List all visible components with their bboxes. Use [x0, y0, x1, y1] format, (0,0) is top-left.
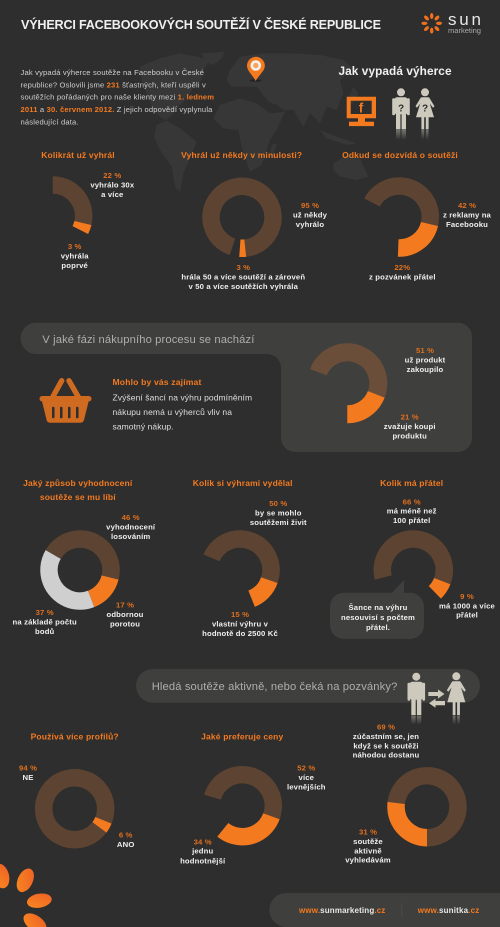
- chart: způsob vyhodnocení: 37 %: [36, 608, 54, 617]
- chart: Kolik má přátel: 9 %: [460, 592, 474, 601]
- donut chart: [307, 343, 387, 423]
- text block: Mohlo by vás zajímat: Mohlo by vás zajímat: [112, 377, 201, 387]
- logo: sun marketing: sun: [448, 10, 481, 29]
- text block: Mohlo by vás zajímat: samotný nákup.: [112, 422, 174, 432]
- chart: Kolikrát už vyhrál: poprvé: [61, 261, 89, 270]
- chart: Kolik si výhrami vydělal: hodnotě do 2500 Kč: [202, 629, 278, 638]
- intro text: následující data.: [20, 117, 79, 126]
- panel: nákupní proces: [21, 323, 472, 452]
- icon: man with question mark: ?: [398, 103, 404, 114]
- chart: způsob vyhodnocení: porotou: [110, 620, 140, 628]
- banner: Hledá soutěže aktivně: Hledá soutěže aktivně, nebo čeká na pozvánky?: [152, 681, 397, 693]
- chart: Jaké preferuje ceny: [180, 732, 326, 865]
- chart: Kolik si výhrami vydělal: by se mohlo: [255, 509, 302, 518]
- chart: Vyhrál už někdy v minulosti: vyhrálo: [296, 220, 324, 229]
- icon: man: [408, 673, 425, 724]
- heading: V jaké fázi nákupního procesu se nachází: [42, 334, 255, 346]
- chart: způsob vyhodnocení: [13, 478, 156, 636]
- chart: Používá více profilů: [19, 732, 134, 849]
- chart: Kolik má přátel: 100 přátel: [393, 516, 430, 525]
- chart: Vyhrál už někdy v minulosti: hrála 50 a více soutěží a zároveň: [181, 272, 305, 282]
- chart: způsob vyhodnocení: 17 %: [116, 601, 134, 610]
- panel: nákupní proces: 21 %: [401, 412, 419, 422]
- heading: Vyhrál už někdy v minulosti?: [181, 150, 302, 160]
- text block: Mohlo by vás zajímat: Zvýšení šancí na výhru podmíněním: [112, 392, 252, 402]
- chart: aktivní hledání soutěží: vyhledávám: [345, 856, 391, 864]
- chart: aktivní hledání soutěží: 69 %: [377, 723, 395, 732]
- callout: šance na výhru: [330, 580, 424, 639]
- heading: Odkud se dozvídá o soutěži: [342, 150, 458, 160]
- title: VÝHERCI FACEBOOKOVÝCH SOUTĚŽÍ V ČESKÉ REPUBLICE: [21, 17, 381, 32]
- chart: Kolik má přátel: má méně než: [387, 507, 437, 516]
- chart: aktivní hledání soutěží: náhodou dostanu: [353, 750, 420, 760]
- chart: aktivní hledání soutěží: 31 %: [359, 828, 377, 837]
- panel: nákupní proces: zakoupilo: [407, 365, 444, 374]
- chart: Odkud se dozvídá o soutěži: 22%: [394, 263, 410, 272]
- panel: nákupní proces: 51 %: [416, 346, 434, 355]
- callout: šance na výhru: Šance na výhru: [349, 603, 408, 612]
- chart: způsob vyhodnocení: losováním: [111, 532, 150, 541]
- chart: Kolikrát už vyhrál: vyhrálo 30x: [90, 180, 135, 190]
- icon: Facebook monitor: [347, 97, 376, 126]
- icon: shopping basket: [40, 381, 92, 423]
- chart: Používá více profilů: 94 %: [19, 764, 37, 773]
- text block: Mohlo by vás zajímat: [112, 377, 252, 432]
- heading: Jaké preferuje ceny: [201, 732, 284, 742]
- logo: sun marketing: [421, 10, 481, 35]
- intro text: Jak vypadá výherce soutěže na Facebooku v České: [20, 68, 204, 77]
- heading: Používá více profilů?: [31, 732, 119, 742]
- chart: Jaké preferuje ceny: jednu: [191, 847, 213, 856]
- chart: Kolik si výhrami vydělal: soutěžemi živit: [250, 518, 307, 527]
- chart: Kolik má přátel: přátel: [456, 611, 478, 620]
- icon: woman with question mark: [416, 88, 434, 140]
- link: sunitka: www.sunitka.cz: [417, 906, 479, 915]
- logo: sun marketing: marketing: [448, 26, 481, 35]
- chart: Odkud se dozvídá o soutěži: [342, 150, 492, 282]
- chart: způsob vyhodnocení: vyhodnocení: [106, 523, 156, 532]
- panel: nákupní proces: už produkt: [405, 356, 446, 364]
- chart: Kolik si výhrami vydělal: 15 %: [231, 610, 249, 619]
- chart: způsob vyhodnocení: na základě počtu: [13, 618, 77, 627]
- icon: woman with question mark: ?: [422, 103, 428, 114]
- heading: Jaký způsob vyhodnocení: [23, 478, 133, 488]
- chart: Kolikrát už vyhrál: 3 %: [68, 242, 82, 251]
- footer bar: [269, 893, 500, 927]
- decorative sun petals: [0, 862, 53, 927]
- intro text: 2011 a 30. červnem 2012. Z jejich odpovědí vyplynula: [20, 105, 213, 114]
- chart: Kolikrát už vyhrál: [16, 150, 135, 270]
- chart: Jaké preferuje ceny: 34 %: [194, 837, 212, 846]
- chart: Vyhrál už někdy v minulosti: už někdy: [293, 211, 328, 220]
- chart: Odkud se dozvídá o soutěži: z reklamy na: [443, 211, 492, 220]
- chart: aktivní hledání soutěží: aktivně: [354, 846, 382, 855]
- banner: Hledá soutěže aktivně: [136, 669, 480, 703]
- chart: Kolik si výhrami vydělal: 50 %: [269, 499, 287, 508]
- chart: způsob vyhodnocení: bodů: [35, 627, 55, 636]
- icon: arrows: [428, 690, 445, 708]
- panel: nákupní proces: produktu: [392, 432, 427, 440]
- chart: Jaké preferuje ceny: 52 %: [297, 764, 315, 773]
- chart: Kolikrát už vyhrál: vyhrála: [61, 252, 89, 260]
- panel: nákupní proces: zvažuje koupi: [384, 422, 436, 431]
- chart: způsob vyhodnocení: 46 %: [122, 513, 140, 522]
- chart: Kolik si výhrami vydělal: vlastní výhru v: [212, 620, 269, 629]
- intro text: republice? Oslovili jsme 231 šťastných, kteří uspěli v: [20, 80, 206, 89]
- intro text: soutěžích pořádaných pro naše klienty mezi 1. lednem: [20, 93, 214, 102]
- chart: Odkud se dozvídá o soutěži: z pozvánek přátel: [369, 272, 436, 282]
- icon: woman: [447, 672, 466, 724]
- chart: Kolik má přátel: má 1000 a více: [439, 601, 496, 610]
- chart: aktivní hledání soutěží: [345, 723, 462, 864]
- chart: způsob vyhodnocení: odbornou: [106, 610, 144, 619]
- heading: Kolik si výhrami vydělal: [193, 478, 293, 488]
- icon: map pin: [247, 57, 265, 82]
- chart: Odkud se dozvídá o soutěži: Facebooku: [446, 220, 488, 229]
- chart: Kolik si výhrami vydělal: [193, 478, 307, 638]
- text block: Mohlo by vás zajímat: nákupu nemá u výherců vliv na: [112, 407, 232, 417]
- chart: Vyhrál už někdy v minulosti: 95 %: [301, 201, 319, 210]
- chart: Odkud se dozvídá o soutěži: 42 %: [458, 201, 476, 210]
- heading: Jak vypadá výherce: Jak vypadá výherce: [338, 64, 452, 78]
- chart: Jaké preferuje ceny: levnějších: [287, 783, 326, 792]
- chart: Používá více profilů: ANO: [117, 840, 134, 849]
- chart: Jaké preferuje ceny: více: [299, 773, 315, 782]
- chart: aktivní hledání soutěží: soutěže: [353, 837, 383, 846]
- heading: Kolik má přátel: [380, 478, 443, 488]
- chart: Vyhrál už někdy v minulosti: v 50 a více soutěžích vyhrála: [189, 282, 299, 291]
- chart: Kolikrát už vyhrál: a více: [101, 190, 124, 199]
- icon: Facebook monitor: f: [359, 100, 364, 116]
- chart: Kolik má přátel: 66 %: [403, 497, 421, 506]
- callout: šance na výhru: přátel.: [366, 623, 390, 632]
- chart: Jaké preferuje ceny: hodnotnější: [180, 856, 226, 865]
- chart: aktivní hledání soutěží: zúčastním se, jen: [353, 732, 419, 741]
- world map background: [140, 52, 368, 192]
- chart: Kolik má přátel: [373, 478, 496, 620]
- chart: Používá více profilů: 6 %: [119, 831, 133, 840]
- heading: Kolikrát už vyhrál: [41, 150, 115, 160]
- chart: Vyhrál už někdy v minulosti: [181, 150, 328, 291]
- chart: Kolikrát už vyhrál: 22 %: [103, 171, 121, 180]
- chart: Používá více profilů: NE: [23, 773, 33, 782]
- heading: soutěže se mu líbí: [40, 492, 116, 502]
- chart: Vyhrál už někdy v minulosti: 3 %: [236, 263, 250, 272]
- callout: šance na výhru: nesouvisí s počtem: [341, 613, 415, 622]
- icon: man with question mark: [392, 88, 410, 140]
- chart: aktivní hledání soutěží: když se k soutěži: [353, 741, 419, 750]
- link: sunmarketing: www.sunmarketing.cz: [298, 906, 385, 915]
